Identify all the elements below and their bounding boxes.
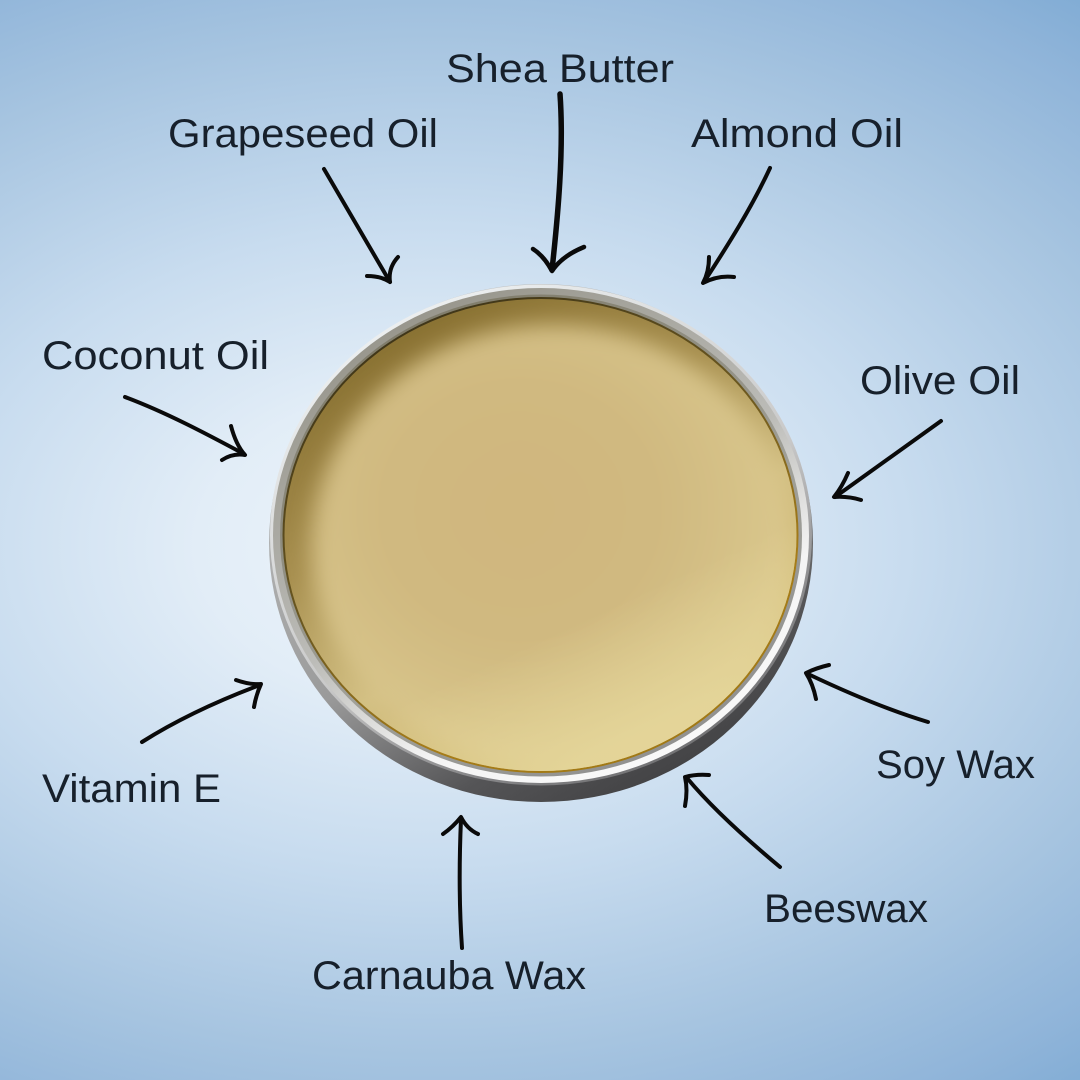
- label: Almond Oil: Almond Oil: [691, 112, 903, 156]
- arrow: Beeswax: [685, 775, 780, 867]
- balm surface: [284, 299, 796, 771]
- label: Carnauba Wax: Carnauba Wax: [312, 954, 586, 998]
- tin outer rim: [269, 284, 813, 802]
- arrow: Olive Oil: [834, 421, 941, 500]
- label: Vitamin E: Vitamin E: [42, 767, 221, 811]
- balm edge: [282, 297, 798, 773]
- arrow: Shea Butter: [533, 94, 584, 271]
- arrow: Carnauba Wax: [443, 817, 478, 948]
- label: Grapeseed Oil: Grapeseed Oil: [168, 112, 438, 156]
- label: Beeswax: Beeswax: [764, 887, 928, 931]
- arrow: Soy Wax: [806, 665, 928, 722]
- arrow: Coconut Oil: [125, 397, 245, 460]
- label: Coconut Oil: Coconut Oil: [42, 334, 269, 378]
- balm shading: [408, 558, 796, 771]
- label: Olive Oil: Olive Oil: [860, 359, 1020, 403]
- tin of balm: [269, 280, 813, 802]
- arrow: Almond Oil: [703, 168, 770, 283]
- tin lip highlight: [273, 288, 809, 783]
- label: Shea Butter: Shea Butter: [446, 47, 674, 91]
- arrow: Grapeseed Oil: [324, 169, 398, 282]
- label: Soy Wax: Soy Wax: [876, 743, 1035, 787]
- arrow: Vitamin E: [142, 680, 261, 742]
